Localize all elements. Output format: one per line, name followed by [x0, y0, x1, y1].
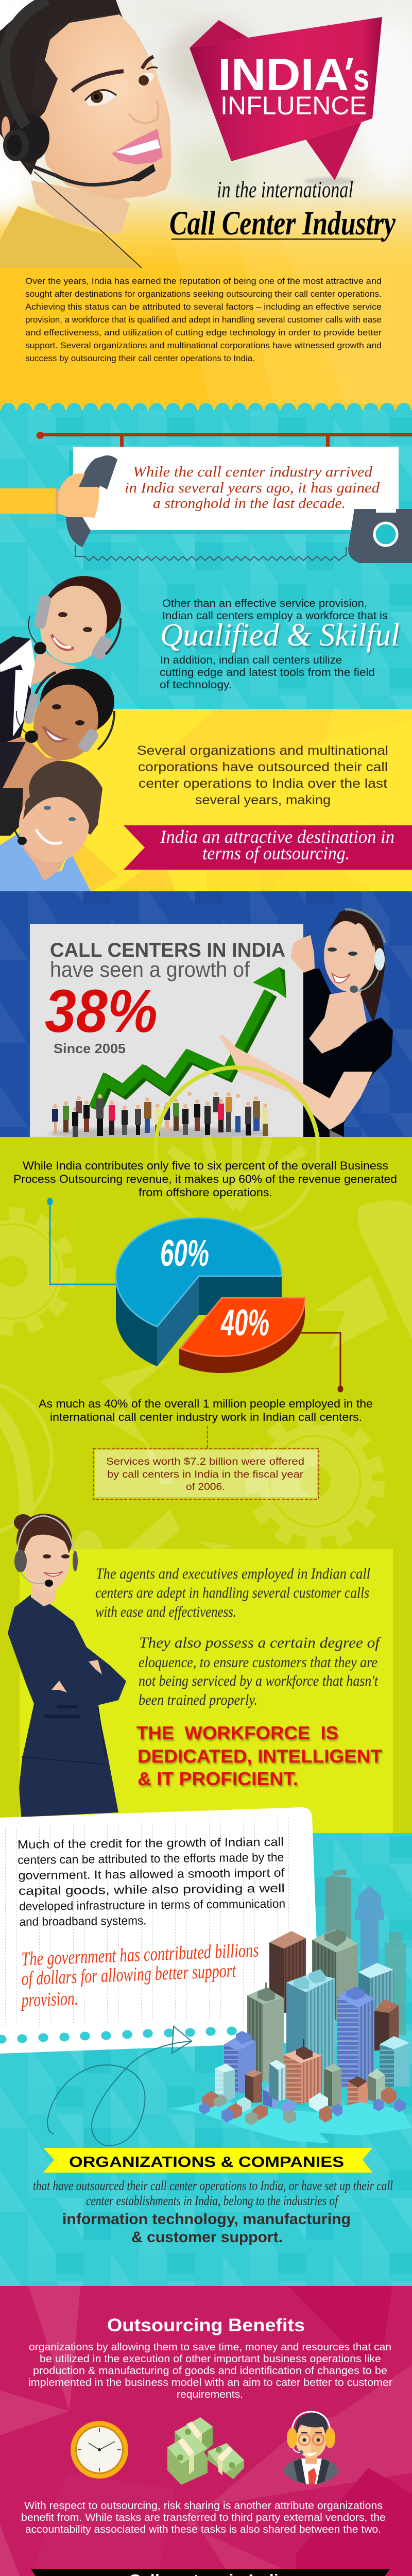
text block: 40 percent employed: international call center industry work in Indian call centers.	[50, 1411, 362, 1423]
panel: yellow section background	[0, 709, 412, 891]
text: credit to government: Much of the credit for the growth of Indian call	[18, 1835, 284, 1851]
tower blue small left	[224, 2031, 256, 2093]
text: since 2005: Since 2005	[54, 1041, 126, 1056]
text block: qualified and skilful: of technology.	[160, 679, 232, 691]
text block: outsourced organizations	[33, 2178, 393, 2208]
tower back light blue	[358, 1963, 393, 2035]
number: 38 percent: 38%	[45, 977, 158, 1045]
subtitle: in the international: in the international	[217, 176, 353, 202]
text block: introduction: Achieving this status can be attributed to several factors – including an effective service	[25, 302, 382, 312]
text block: qualified and skilful: In addition, indian call centers utilize	[160, 654, 342, 666]
chart: 3D pie chart 60 percent and 40 percent	[47, 1197, 343, 1392]
icon: hand holding handset	[0, 455, 117, 547]
banner: organizations and companies	[43, 2148, 372, 2173]
panel: title ribbon	[190, 17, 382, 185]
small cubes and base	[172, 2087, 412, 2143]
callout: services worth 7.2 billion	[93, 1426, 319, 1499]
text block: industries: & customer support.	[131, 2229, 283, 2246]
heading: Influence: INFLUENCE	[220, 91, 367, 120]
tower striped light	[215, 2063, 235, 2102]
text block: introduction: provision, a workforce that is qualified and adept in handling several customer calls with ease	[25, 315, 382, 325]
text: government contributed billions: provision.	[20, 1988, 78, 2011]
quote text: a stronghold in the last decade.	[153, 495, 346, 512]
text block: eloquence: eloquence, to ensure customers that they are	[139, 1654, 377, 1671]
text block: outsourcing benefits: be utilized in the execution of other important business operations like	[40, 2353, 381, 2365]
quote text: While the call center industry arrived	[133, 464, 373, 480]
heading: workforce is dedicated	[136, 1722, 382, 1789]
text block: outsourced organizations: center establishments in India, belong to the industries of	[86, 2193, 339, 2208]
text: credit to government: centers can be attributed to the efforts made by the	[18, 1851, 284, 1867]
panel: hanging quote sign with telephone	[0, 432, 412, 563]
text block: industries	[62, 2211, 351, 2246]
text: have seen a growth of: have seen a growth of	[50, 957, 250, 981]
tower teal mid	[286, 1969, 335, 2087]
script heading: Qualified & Skilful: Qualified & Skilful	[160, 618, 400, 653]
panel: lime section background with watermarks	[0, 1067, 412, 1833]
panel: teal section background under note	[0, 2040, 312, 2286]
pie slice: 40 percent	[179, 1298, 305, 1373]
illustration: second woman agent with headset	[0, 665, 114, 835]
text block: agents and executives: with ease and effectiveness.	[95, 1603, 236, 1620]
text block: industries: information technology, manufacturing	[62, 2211, 351, 2228]
text block: introduction: Over the years, India has earned the reputation of being one of the most attractive and	[25, 276, 382, 286]
pie slice: 40 percent: 40%	[220, 1302, 269, 1344]
illustration: man agent with headset	[0, 761, 102, 891]
text block: outsourced operations: several years, making	[195, 793, 331, 807]
icon: cartoon call agent	[283, 2412, 339, 2484]
text block: qualified and skilful: Indian call centers employ a workforce that is	[162, 610, 388, 622]
text block: risk sharing	[21, 2500, 386, 2535]
callout: services worth 7.2 billion: of 2006.	[186, 1482, 225, 1493]
text: credit to government: government. It has allowed a smooth import of	[18, 1866, 285, 1882]
illustration: crowd of people	[49, 1092, 270, 1140]
illustration: smiling hero call center agent	[0, 0, 171, 268]
text block: eloquence: been trained properly.	[139, 1691, 258, 1708]
text block: risk sharing: With respect to outsourcing, risk sharing is another attribute organizations	[24, 2500, 383, 2512]
connector: brown line	[300, 1333, 343, 1392]
text block: outsourced operations	[137, 743, 388, 807]
tower orange center	[284, 2039, 322, 2105]
text: credit to government: and broadband systems.	[19, 1913, 147, 1928]
text block: 40 percent employed: As much as 40% of the overall 1 million people employed in the	[39, 1397, 373, 1410]
pie slice: 60 percent: 60%	[160, 1233, 209, 1274]
quote text: in India several years ago, it has gained	[125, 480, 380, 496]
tower back green	[312, 1929, 358, 2020]
text block: outsourced operations: Several organizations and multinational	[137, 743, 388, 758]
text block: outsourced operations: corporations have outsourced their call	[138, 760, 388, 774]
text block: offshore revenue: from offshore operations.	[139, 1186, 272, 1199]
tower brown little	[245, 2070, 262, 2103]
icon: telephone base	[348, 509, 412, 563]
text block: introduction: and effectiveness, and utilization of cutting edge technology in order to provide better	[25, 328, 382, 337]
panel: teal section background lower	[312, 1833, 412, 2286]
callout: services worth 7.2 billion: by call centers in India in the fiscal year	[107, 1469, 304, 1480]
panel: blue section background	[0, 891, 412, 1137]
illustration: woman holding growth card	[219, 909, 393, 1137]
arrow: green growth arrow	[94, 967, 286, 1110]
illustration: isometric city skyline	[172, 1869, 412, 2143]
text block: outsourced operations: center operations to India over the last	[139, 776, 387, 791]
panel: magenta section background	[0, 2286, 412, 2576]
illustration: businesswoman with headset	[8, 1514, 126, 1817]
arrow: hand drawn loop arrow	[47, 2026, 192, 2146]
banner: attractive destination: India an attractive destination in	[160, 826, 394, 847]
heading: workforce is dedicated: DEDICATED, INTELLIGENT	[138, 1745, 382, 1767]
text block: eloquence: They also possess a certain degree of	[139, 1634, 382, 1651]
back skyline	[325, 1869, 406, 2035]
panel: teal section background with scalloped edge	[0, 403, 412, 709]
heading: India's: s	[353, 57, 369, 98]
callout: services worth 7.2 billion: Services worth $7.2 billion were offered	[106, 1456, 304, 1467]
panel: tilted white note	[0, 1807, 320, 2054]
small towers	[263, 2060, 385, 2112]
tower light right	[380, 2036, 409, 2087]
text block: outsourcing benefits: organizations by allowing them to save time, money and resources that can	[29, 2342, 391, 2353]
quote text	[125, 464, 380, 512]
text: government contributed billions	[20, 1939, 259, 2011]
panel: workforce bright panel	[20, 1549, 393, 1833]
text block: outsourcing benefits: production & manufacturing of goods and identification of changes to be	[33, 2365, 387, 2377]
tower blue big	[337, 1987, 374, 2088]
heading: workforce is dedicated: & IT PROFICIENT.	[138, 1768, 298, 1789]
text block: offshore revenue: Process Outsourcing revenue, it makes up 60% of the revenue generated	[13, 1173, 397, 1185]
text block: introduction: success by outsourcing their call center operations to India.	[25, 353, 255, 363]
icon: clock	[71, 2421, 128, 2479]
text: government contributed billions: of dollars for allowing better support	[21, 1960, 237, 1990]
banner: organizations and companies: ORGANIZATIONS & COMPANIES	[69, 2154, 344, 2171]
heading: India's: INDIA	[218, 49, 349, 100]
illustration: woman agent with headset	[0, 576, 121, 757]
connector: blue line	[47, 1197, 116, 1284]
text block: qualified and skilful: cutting edge and latest tools from the field	[160, 667, 375, 679]
note punch holes	[0, 2027, 237, 2043]
background: hero and intro yellow	[0, 0, 412, 412]
heading: workforce is dedicated: THE WORKFORCE IS	[136, 1722, 338, 1743]
text: credit to government: capital goods, while also providing a well	[19, 1882, 285, 1897]
banner: wealth of services	[31, 2569, 390, 2576]
heading: call centers in india: CALL CENTERS IN INDIA	[50, 939, 285, 961]
text: credit to government	[18, 1835, 286, 1928]
text block: introduction: support. Several organizations and multinational corporations have witnessed growth and	[25, 341, 382, 350]
banner: attractive destination: terms of outsourcing.	[202, 843, 350, 863]
text block: offshore revenue: While India contributes only five to six percent of the overall Business	[23, 1159, 388, 1172]
text block: offshore revenue	[13, 1159, 397, 1199]
pie slice: 60 percent	[116, 1218, 282, 1366]
text block: qualified and skilful	[160, 598, 400, 691]
icon: telephone cord	[75, 545, 346, 561]
text block: eloquence	[139, 1634, 382, 1708]
text block: outsourcing benefits: requirements.	[177, 2389, 243, 2400]
text block: introduction: sought after destinations for organizations seeking outsourcing their call center operations.	[25, 289, 382, 299]
icon: stacks of money	[167, 2417, 244, 2485]
text block: introduction	[25, 276, 382, 363]
text block: 40 percent employed	[39, 1397, 373, 1423]
banner: attractive destination	[124, 825, 412, 870]
text block: agents and executives: The agents and executives employed in Indian call	[96, 1565, 370, 1582]
tower back brown	[269, 1931, 306, 2013]
text: credit to government: developed infrastructure in terms of communication	[19, 1897, 285, 1913]
text block: qualified and skilful: Other than an effective service provision,	[162, 598, 367, 609]
text block: risk sharing: accountability associated with these tasks is also shared between the two.	[25, 2524, 381, 2535]
text block: eloquence: not being serviced by a workforce that hasn't	[139, 1672, 379, 1689]
heading: outsourcing benefits: Outsourcing Benefits	[107, 2315, 305, 2335]
text block: agents and executives	[95, 1565, 370, 1620]
text block: risk sharing: benefit from. While tasks are transferred to third party external vendors, the	[21, 2512, 386, 2523]
text block: outsourcing benefits	[28, 2342, 392, 2400]
tower brown right	[374, 1999, 399, 2050]
text: government contributed billions: The government has contributed billions	[21, 1939, 259, 1970]
tower green left	[247, 1982, 284, 2081]
text block: agents and executives: centers are adept in handling several customer calls	[95, 1584, 369, 1601]
text block: outsourcing benefits: implemented in the business model with an aim to cater better to customer	[28, 2377, 392, 2388]
panel: growth statistic card	[30, 924, 303, 1140]
